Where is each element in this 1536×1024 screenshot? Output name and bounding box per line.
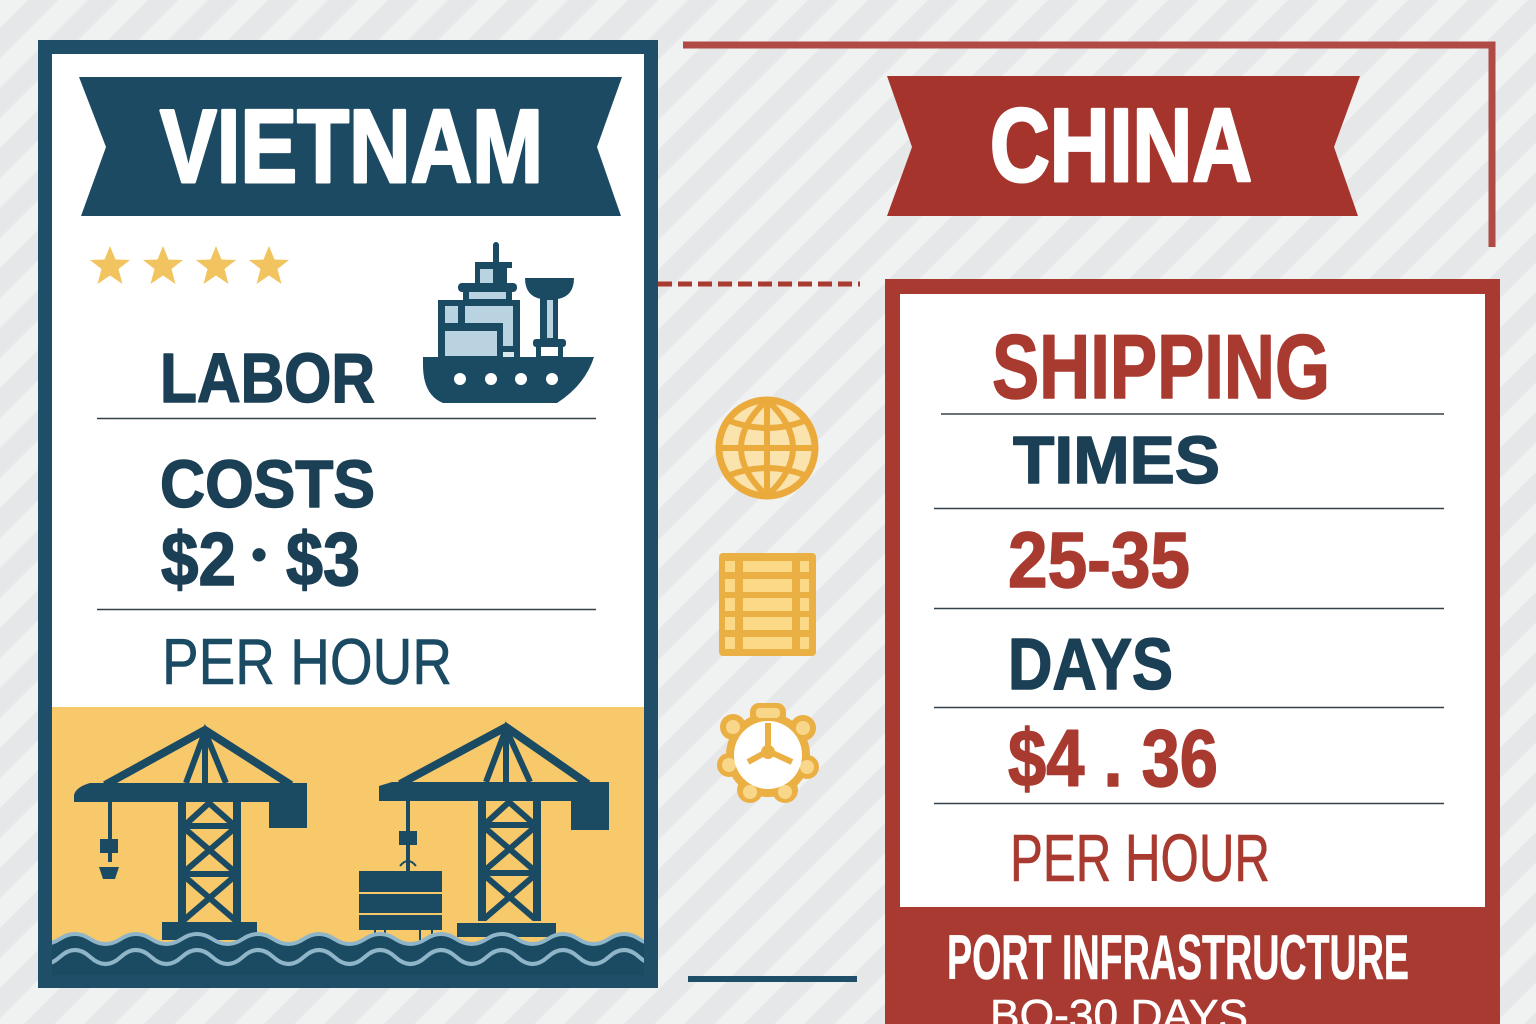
- value: $2 - $3: •: [251, 528, 267, 580]
- label: COSTS: COSTS: [160, 447, 375, 522]
- connector: top red line: [683, 45, 1492, 247]
- connector: dashed red line: [658, 282, 860, 286]
- China banner: [887, 76, 1360, 216]
- Vietnam banner: VIETNAM: [160, 89, 543, 205]
- heading: SHIPPING: SHIPPING: [992, 317, 1330, 418]
- rating stars: [90, 246, 289, 284]
- icon: container: [719, 553, 816, 656]
- icon: cargo ship: [423, 242, 594, 403]
- crane right with container: [359, 727, 609, 943]
- icon: globe: [719, 400, 815, 496]
- value: $4.36: $4 . 36: [1008, 714, 1218, 804]
- value: $2 - $3: [161, 517, 360, 601]
- label: per hour: PER HOUR: [1010, 821, 1270, 896]
- panel: China: [885, 279, 1500, 1024]
- connector: bottom blue line: [688, 976, 857, 982]
- value: $2 - $3: $2: [161, 517, 236, 601]
- label: TIMES: TIMES: [1013, 423, 1220, 498]
- label: DAYS: DAYS: [1008, 625, 1173, 705]
- crane left: [74, 730, 307, 940]
- label: per hour: PER HOUR: [162, 625, 452, 698]
- icon: gear clock: [717, 703, 819, 803]
- label: LABOR: LABOR: [160, 339, 375, 417]
- China banner: CHINA: [990, 88, 1252, 204]
- water: [52, 932, 644, 966]
- value: 25-35: 25-35: [1008, 515, 1190, 604]
- Vietnam port scene: [52, 707, 644, 966]
- panel: Vietnam: [38, 40, 658, 988]
- value: $2 - $3: $3: [286, 517, 360, 601]
